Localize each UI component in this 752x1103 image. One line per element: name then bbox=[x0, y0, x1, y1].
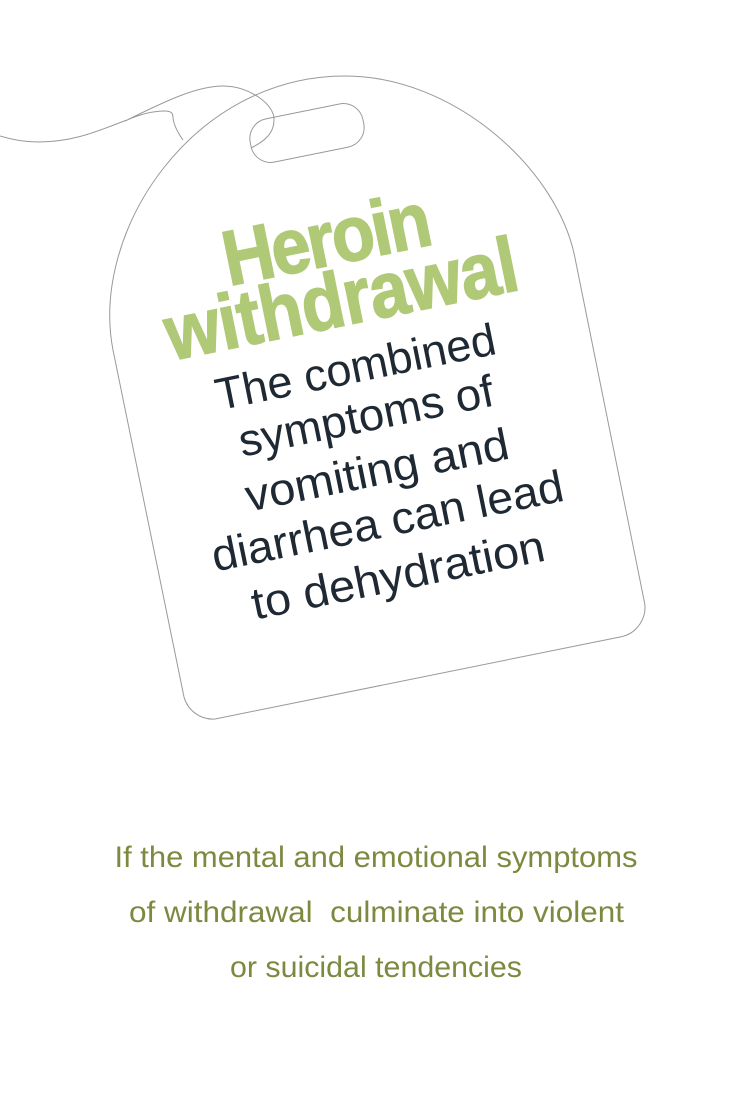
footer caption: of withdrawal culminate into violent bbox=[129, 896, 625, 929]
heading: withdrawal bbox=[156, 220, 525, 377]
footer caption: If the mental and emotional symptoms bbox=[114, 841, 638, 874]
tag body text: symptoms of bbox=[234, 365, 498, 467]
tag body text: vomiting and bbox=[241, 418, 513, 522]
heading: Heroin bbox=[215, 175, 439, 302]
footer caption bbox=[114, 841, 638, 984]
tag slot bbox=[246, 100, 368, 166]
tag body text bbox=[207, 313, 568, 630]
footer caption: or suicidal tendencies bbox=[230, 951, 522, 984]
tag body text: diarrhea can lead bbox=[207, 460, 568, 581]
tag body text: to dehydration bbox=[247, 520, 549, 630]
string looped through the slot bbox=[0, 86, 274, 148]
tag body text: The combined bbox=[211, 313, 500, 420]
tag outline bbox=[110, 76, 645, 719]
panel: hanging tag bbox=[0, 76, 645, 719]
